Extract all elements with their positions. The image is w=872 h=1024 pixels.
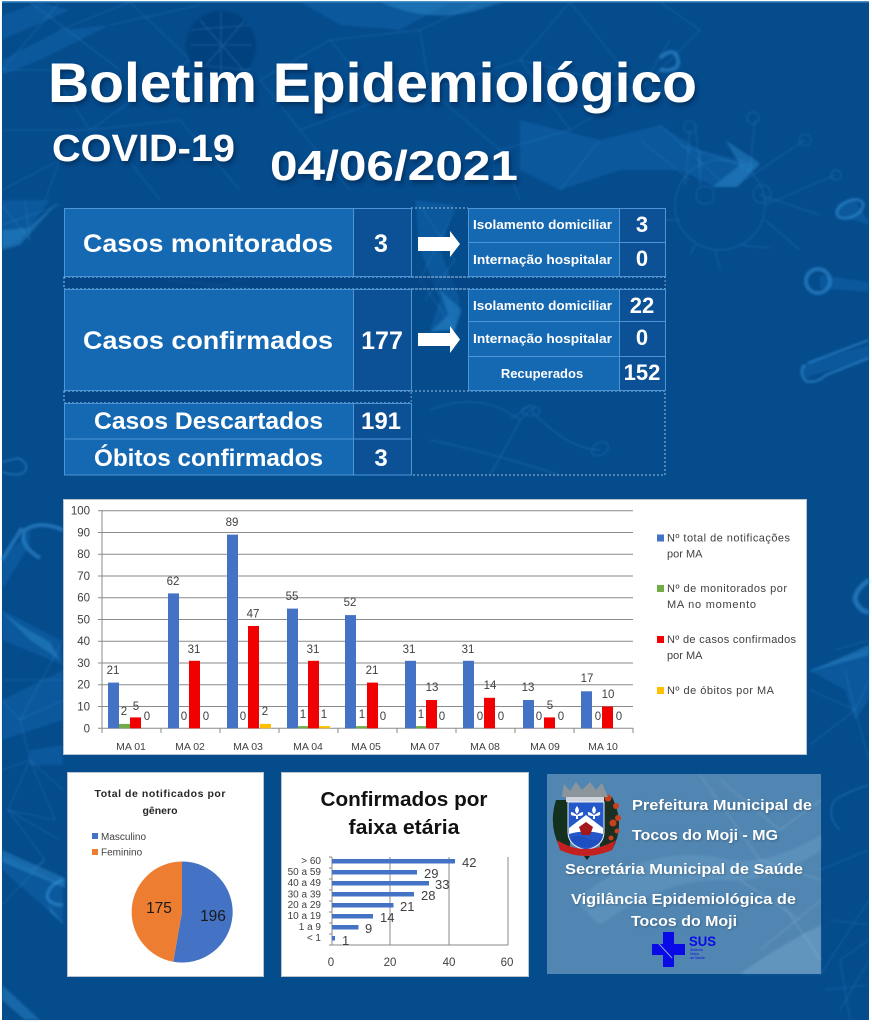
y axis labels: 80: [77, 549, 90, 561]
y axis labels: 90: [77, 528, 90, 540]
x axis labels: 0: [328, 957, 334, 969]
x axis labels: MA 08: [470, 741, 500, 753]
pie legend: Masculino: [101, 832, 146, 843]
data labels: 0: [144, 711, 150, 723]
label: internação hospitalar: Internação hospitalar: [473, 331, 612, 346]
bars: monitored: [119, 724, 427, 728]
data labels: [107, 517, 622, 723]
chart title second line: faixa etária: [348, 817, 460, 839]
x axis labels: MA 07: [410, 741, 440, 753]
pie legend: [92, 832, 146, 858]
y axis labels: 50: [77, 614, 90, 626]
chart legend: Nº total de notificações: [667, 532, 790, 544]
age labels: 50 a 59: [288, 867, 321, 878]
y axis labels: 70: [77, 571, 90, 583]
bar values: 14: [380, 910, 394, 925]
value: isolamento: 22: [630, 293, 654, 318]
date: 04/06/2021: [270, 142, 518, 189]
pie slice: feminino: [132, 862, 182, 962]
icon: SUS logo: Único: [690, 952, 699, 956]
x axis labels: 40: [443, 957, 455, 969]
panel: bar chart by MA: [64, 500, 806, 754]
panel: casos monitorados: [64, 208, 412, 276]
label: óbitos confirmados: Óbitos confirmados: [94, 444, 323, 472]
x axis labels: MA 04: [293, 741, 323, 753]
data labels: 0: [616, 711, 622, 723]
x axis labels: [328, 957, 513, 969]
y axis labels: 60: [77, 593, 90, 605]
bars: confirmed: [130, 626, 613, 728]
value: isolamento: 3: [636, 212, 648, 237]
x axis labels: [116, 741, 618, 753]
bar values: 29: [424, 866, 438, 881]
y axis labels: 40: [77, 636, 90, 648]
data labels: 62: [167, 576, 179, 588]
y axis labels: 20: [77, 680, 90, 692]
data labels: 17: [581, 673, 593, 685]
x axis labels: MA 01: [116, 741, 146, 753]
panel: monitorados breakdown: [468, 208, 666, 276]
arrow: monitorados breakdown: [418, 231, 460, 257]
icon: SUS logo: Sistema: [690, 948, 703, 952]
label: casos confirmados: Casos confirmados: [83, 327, 333, 355]
panel: pie chart by gender: [68, 772, 264, 976]
y axis labels: 0: [84, 723, 90, 735]
y axis labels: 10: [77, 702, 90, 714]
y axis labels: 30: [77, 658, 90, 670]
pie slice: masculino: [173, 861, 233, 962]
data labels: 47: [247, 608, 259, 620]
data labels: 52: [344, 597, 356, 609]
value: recuperados: 152: [624, 360, 660, 385]
value: monitorados: 3: [374, 230, 388, 258]
pie title second line: gênero: [142, 805, 178, 817]
x axis labels: MA 05: [351, 741, 381, 753]
age labels: 1 a 9: [299, 922, 321, 933]
y axis labels: 100: [71, 506, 90, 518]
age labels: 40 a 49: [288, 878, 321, 889]
x axis labels: MA 02: [175, 741, 205, 753]
x axis labels: MA 09: [530, 741, 560, 753]
data labels: 0: [240, 711, 246, 723]
data labels: 89: [226, 517, 238, 529]
value: confirmados: 177: [361, 327, 403, 355]
data labels: 21: [107, 665, 119, 677]
chart legend: MA no momento: [667, 599, 756, 611]
data labels: 21: [366, 665, 378, 677]
data labels: 13: [426, 682, 438, 694]
panel: institution credits: [547, 774, 821, 974]
horizontal bars: [332, 859, 455, 940]
chart title: Confirmados por: [320, 789, 488, 811]
text: prefeitura line 1: Prefeitura Municipal de: [632, 798, 812, 814]
age labels: 10 a 19: [288, 911, 321, 922]
chart legend: Nº de casos confirmados: [667, 634, 796, 646]
y axis labels: [71, 506, 90, 735]
text: vigilância line 2: Tocos do Moji: [631, 914, 737, 930]
title: Boletim Epidemiológico: [48, 51, 697, 114]
label: isolamento domiciliar: Isolamento domiciliar: [473, 217, 612, 232]
bar values: [342, 855, 476, 948]
chart legend: [657, 532, 796, 697]
x axis labels: MA 10: [588, 741, 618, 753]
label: casos monitorados: Casos monitorados: [83, 230, 333, 258]
x axis labels: MA 03: [233, 741, 263, 753]
data labels: 31: [188, 644, 200, 656]
age labels: > 60: [301, 856, 321, 867]
data labels: 0: [536, 711, 542, 723]
bars: total notifications: [108, 535, 592, 728]
value: óbitos: 3: [374, 445, 388, 472]
text: vigilância line 1: Vigilância Epidemiológica de: [571, 892, 796, 908]
value: descartados: 191: [361, 408, 401, 435]
data labels: 2: [262, 706, 268, 718]
value: masculino: 196: [200, 908, 226, 925]
data labels: 31: [403, 644, 415, 656]
panel: descartados and óbitos: [64, 404, 412, 475]
label: internação hospitalar: Internação hospitalar: [473, 252, 612, 267]
label: recuperados: Recuperados: [501, 366, 583, 381]
bars: deaths: [260, 724, 330, 728]
data labels: 5: [133, 701, 139, 713]
text: prefeitura line 2: Tocos do Moji - MG: [632, 828, 778, 844]
data labels: 0: [498, 711, 504, 723]
data labels: 5: [547, 700, 553, 712]
bar values: 28: [421, 888, 435, 903]
data labels: 1: [300, 709, 306, 721]
data labels: 0: [181, 711, 187, 723]
dotted connector frames: [64, 208, 665, 475]
bar values: 33: [435, 877, 449, 892]
panel: confirmed by age bracket: [282, 772, 528, 976]
data labels: 2: [121, 706, 127, 718]
data labels: 0: [203, 711, 209, 723]
age labels: 20 a 29: [288, 900, 321, 911]
data labels: 55: [286, 591, 298, 603]
subtitle COVID-19: COVID-19: [52, 128, 235, 170]
icon: municipal coat of arms: [553, 782, 621, 860]
icon: SUS logo: SUS: [689, 933, 716, 949]
pie title: Total de notificados por: [94, 788, 226, 800]
data labels: 10: [602, 689, 614, 701]
label: casos descartados: Casos Descartados: [94, 408, 323, 435]
panel: casos confirmados: [64, 290, 412, 390]
chart legend: Nº de monitorados por: [667, 583, 787, 595]
data labels: 14: [484, 680, 497, 692]
chart legend: Nº de óbitos por MA: [667, 685, 775, 697]
data labels: 31: [307, 644, 319, 656]
x axis labels: 20: [384, 957, 396, 969]
pie legend: Feminino: [101, 848, 143, 858]
value: internação: 0: [636, 325, 648, 350]
chart legend: por MA: [667, 650, 703, 662]
icon: SUS logo: [652, 932, 716, 967]
bar values: 1: [342, 933, 349, 948]
arrow: confirmados breakdown: [418, 326, 460, 353]
data labels: 0: [380, 711, 386, 723]
age labels: < 1: [307, 933, 321, 944]
x axis labels: 60: [501, 957, 513, 969]
text: secretaria: Secretária Municipal de Saúde: [565, 862, 803, 878]
data labels: 0: [439, 711, 445, 723]
data labels: 1: [418, 709, 424, 721]
data labels: 0: [477, 711, 483, 723]
label: isolamento domiciliar: Isolamento domiciliar: [473, 298, 612, 313]
bar values: 42: [462, 855, 476, 870]
bar values: 21: [400, 899, 414, 914]
value: internação: 0: [636, 246, 648, 271]
panel: confirmados breakdown: [468, 290, 666, 390]
icon: SUS logo: de Saúde: [690, 956, 705, 960]
data labels: 13: [522, 682, 534, 694]
data labels: 31: [462, 644, 474, 656]
data labels: 0: [558, 711, 564, 723]
chart legend: por MA: [667, 548, 703, 560]
age labels: 30 a 39: [288, 890, 321, 900]
data labels: 1: [321, 709, 327, 721]
value: feminino: 175: [146, 900, 172, 917]
data labels: 0: [595, 711, 601, 723]
data labels: 1: [359, 709, 365, 721]
age labels: [288, 856, 321, 944]
bar values: 9: [365, 921, 372, 936]
